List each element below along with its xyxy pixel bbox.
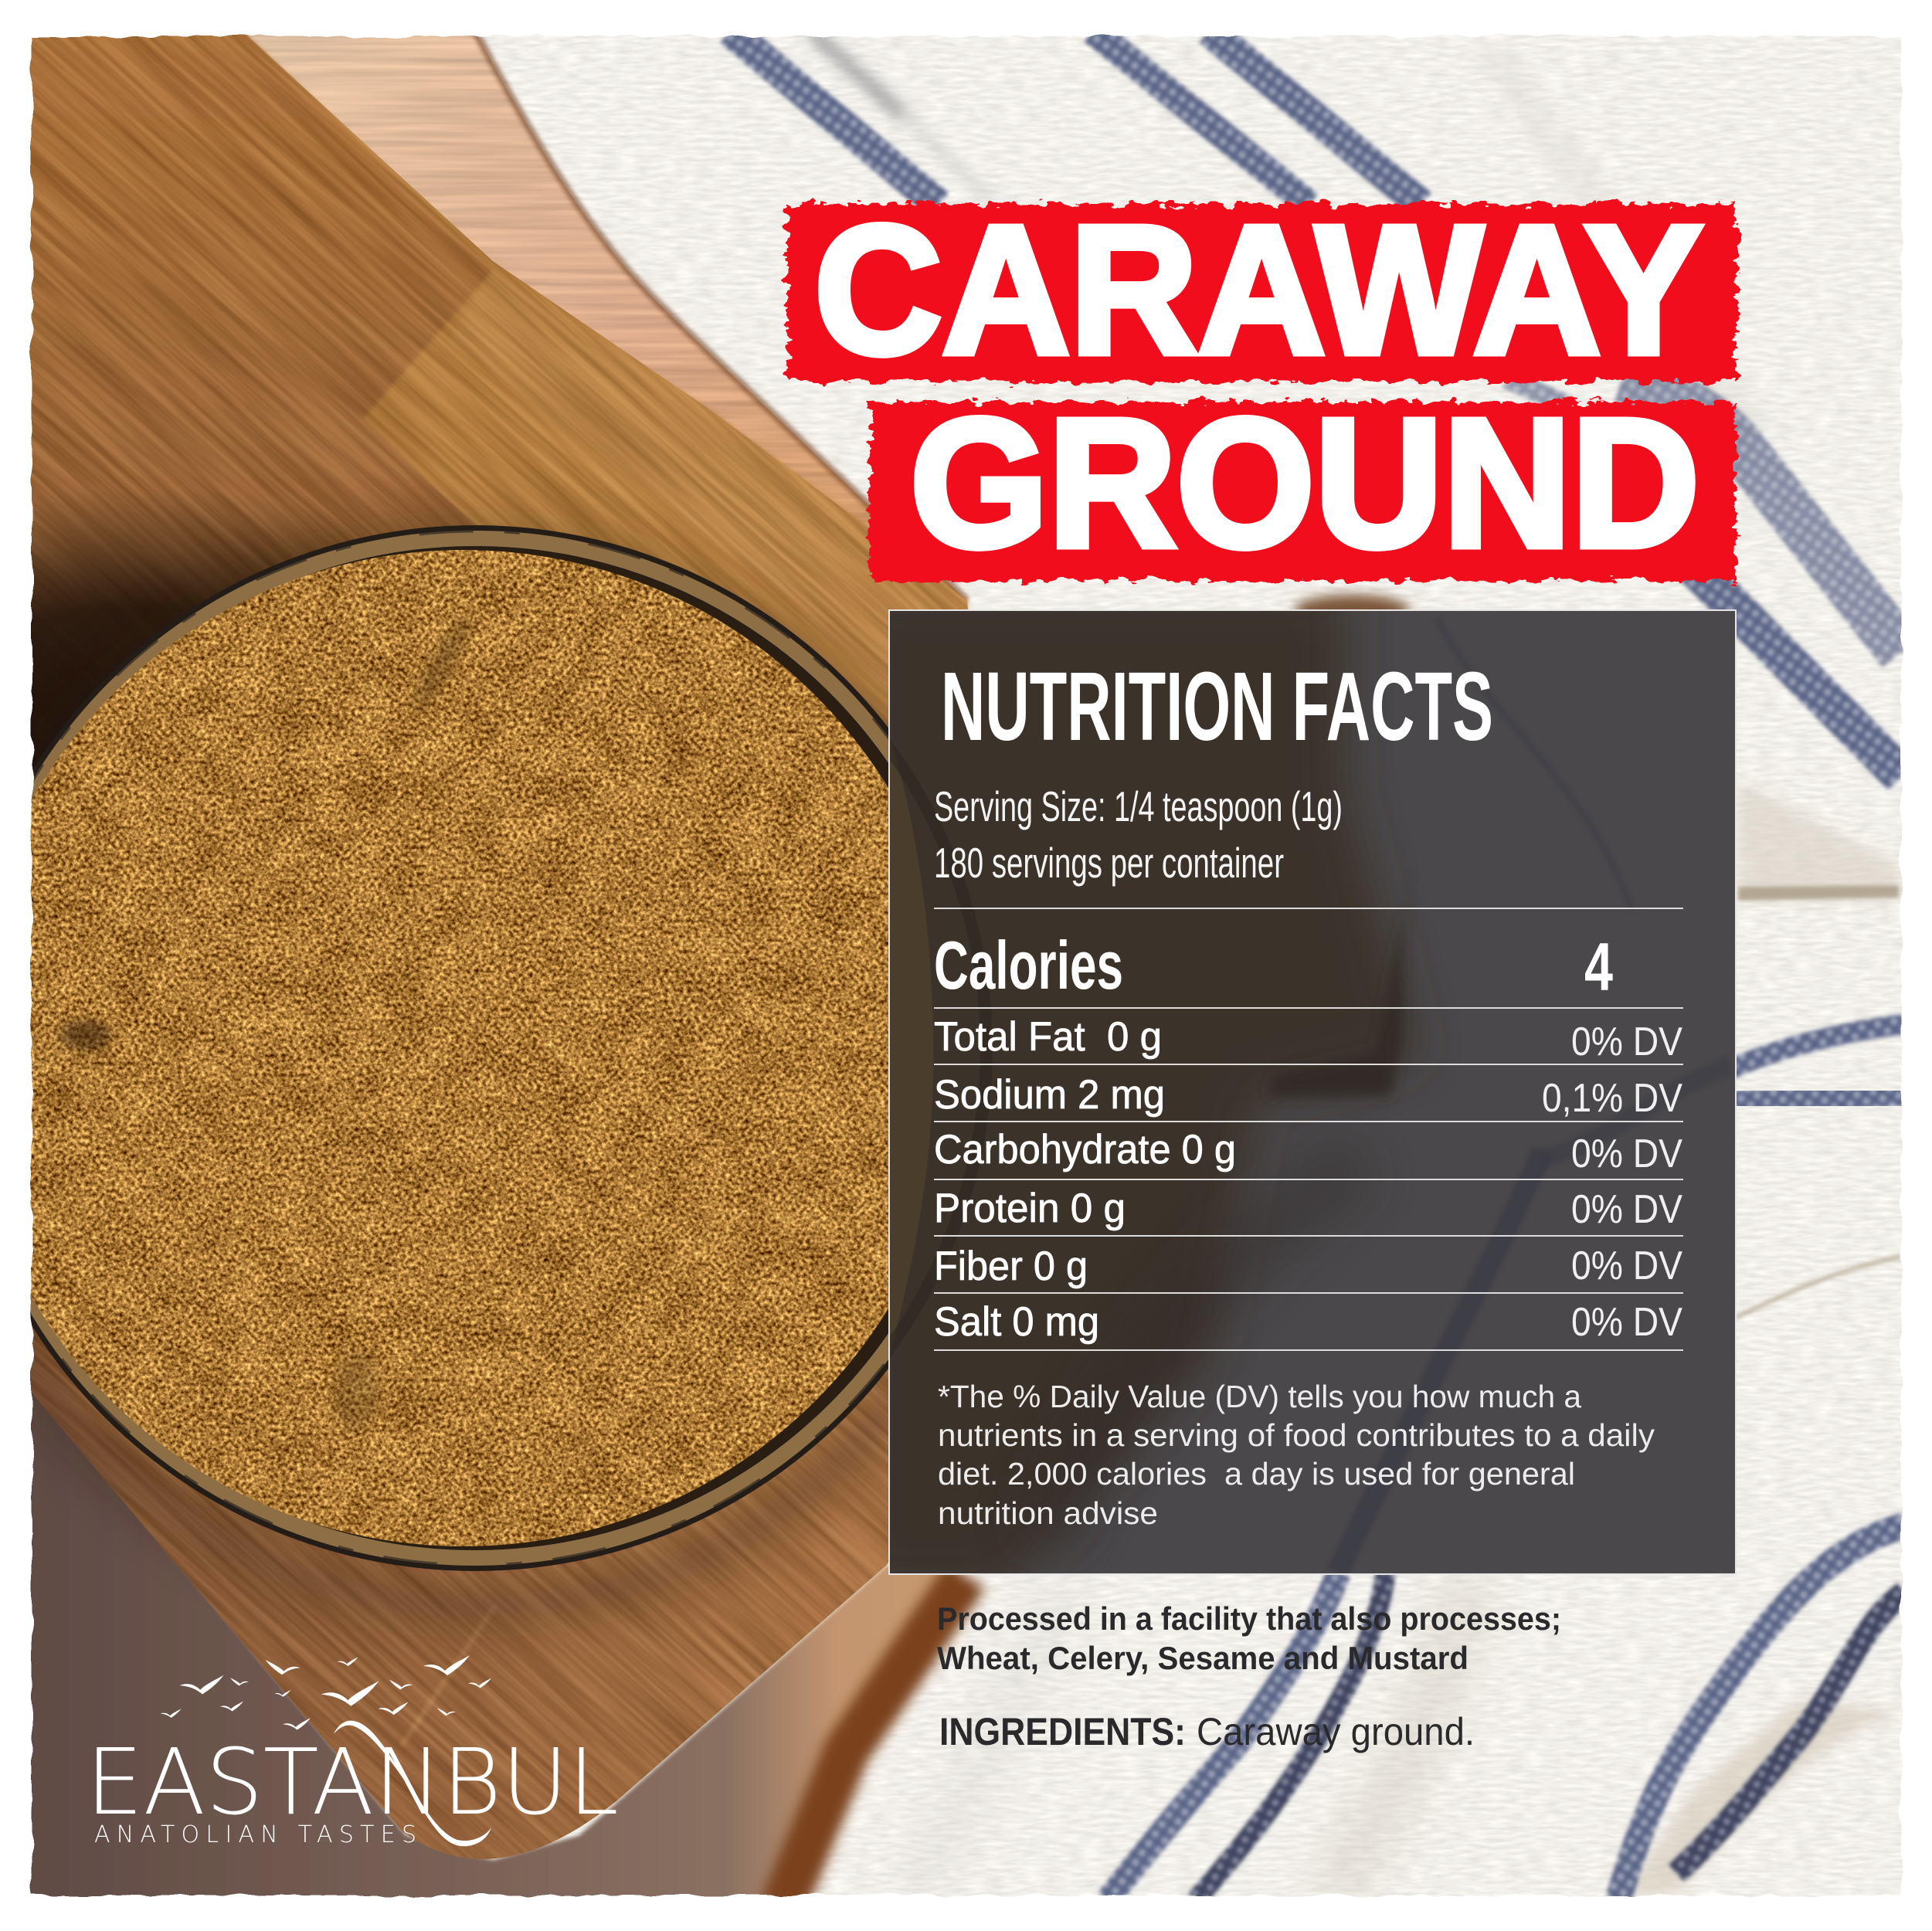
bowl shadow — [0, 541, 1008, 1607]
ingredients — [939, 1710, 1475, 1753]
allergen statement: Processed in a facility that also processes; — [937, 1600, 1561, 1637]
nutrition heading: NUTRITION FACTS — [941, 652, 1493, 761]
panel border — [889, 610, 1736, 1574]
table under board — [23, 1375, 966, 1908]
fiber: Fiber 0 g — [934, 1244, 1088, 1289]
salt: Salt 0 mg — [934, 1299, 1099, 1345]
sodium: Sodium 2 mg — [934, 1072, 1165, 1118]
salt dv: 0% DV — [1571, 1300, 1682, 1345]
carbohydrate dv: 0% DV — [1571, 1132, 1682, 1176]
panel: nutrition facts — [0, 537, 1736, 1591]
swoosh — [334, 1721, 491, 1846]
daily value footnote: nutrition advise — [938, 1495, 1158, 1531]
towel stripes — [730, 31, 1904, 1900]
servings per container: 180 servings per container — [934, 839, 1284, 887]
cloth towel — [402, 34, 1903, 1897]
calories value: 4 — [1584, 928, 1613, 1005]
allergen statement: Wheat, Celery, Sesame and Mustard — [937, 1640, 1469, 1676]
protein: Protein 0 g — [934, 1186, 1126, 1231]
fiber dv: 0% DV — [1571, 1244, 1682, 1288]
serving size: Serving Size: 1/4 teaspoon (1g) — [934, 782, 1343, 830]
allergen statement — [937, 1600, 1561, 1676]
total fat: Total Fat 0 g — [934, 1014, 1162, 1060]
daily value footnote: diet. 2,000 calories a day is used for general — [938, 1456, 1575, 1492]
panel background — [0, 537, 1736, 1591]
dark shadow on board — [0, 487, 587, 1027]
bowl — [0, 525, 998, 1571]
calories label: Calories — [934, 927, 1123, 1003]
ground caraway powder — [0, 550, 962, 1546]
ingredients value: Caraway ground. — [1197, 1710, 1475, 1753]
daily value footnote — [938, 1379, 1655, 1531]
heading ground: GROUND — [910, 381, 1699, 585]
heading caraway: CARAWAY — [814, 188, 1703, 392]
wordmark: EASTANBUL — [86, 1729, 619, 1835]
red label caraway — [787, 204, 1737, 382]
pale wood strip — [232, 29, 973, 616]
daily value footnote: nutrients in a serving of food contributes to a daily — [938, 1417, 1655, 1453]
ingredients label: INGREDIENTS: — [939, 1710, 1186, 1753]
daily value column — [1542, 1020, 1682, 1345]
logo: eastanbul — [86, 1655, 619, 1848]
sodium dv: 0,1% DV — [1542, 1076, 1682, 1121]
red label ground — [870, 402, 1737, 581]
total fat dv: 0% DV — [1571, 1020, 1682, 1064]
nutrient rows — [934, 1014, 1236, 1345]
icon: birds — [161, 1655, 491, 1730]
daily value footnote: *The % Daily Value (DV) tells you how much a — [938, 1379, 1581, 1414]
title: red torn labels — [787, 188, 1737, 585]
serving info — [934, 782, 1343, 887]
blurred brown shadow above panel — [1294, 595, 1410, 626]
calories row — [934, 927, 1613, 1005]
carbohydrate: Carbohydrate 0 g — [934, 1127, 1236, 1173]
tagline: ANATOLIAN TASTES — [94, 1821, 416, 1848]
protein dv: 0% DV — [1571, 1187, 1682, 1232]
